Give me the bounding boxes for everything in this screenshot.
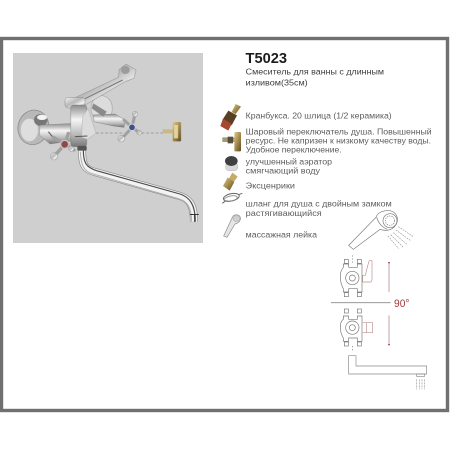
- upper lever: [363, 261, 372, 282]
- text: aerator: улучшенный аэратор: [246, 156, 332, 166]
- lever handle: [72, 64, 136, 107]
- text: cartridge: Кранбукса. 20 шлица (1/2 керамика): [246, 110, 392, 120]
- cold cross handle: [118, 111, 142, 142]
- diagram: shower head line drawing: [349, 211, 413, 249]
- lower lever: [363, 323, 373, 333]
- subtitle: [246, 66, 384, 88]
- hot cross handle: [50, 133, 74, 160]
- text: hand shower: массажная лейка: [246, 230, 317, 240]
- text: aerator: [246, 156, 332, 175]
- panel: faucet photo: [13, 53, 203, 243]
- text: hose: шланг для душа с двойным замком: [246, 199, 392, 209]
- text: aerator: смягчающий воду: [246, 165, 321, 175]
- icon: aerator: [225, 156, 238, 171]
- text: diverter: ресурс. Не капризен к низкому качеству воды.: [246, 135, 431, 145]
- icon: shower hose: [222, 192, 242, 203]
- icon: hand shower small: [224, 215, 240, 237]
- range arrows: [388, 263, 390, 345]
- wall flange right: [91, 96, 112, 121]
- icon: eccentrics: [223, 173, 238, 191]
- text: diverter: Шаровый переключатель душа. Повышенный: [246, 126, 432, 136]
- divider line: [331, 301, 391, 304]
- icon: diverter: [222, 132, 241, 151]
- icon: cartridge: [220, 104, 241, 131]
- body: [39, 123, 78, 144]
- subtitle: Смеситель для ванны с длинным: [246, 66, 384, 76]
- upper position valve: [340, 255, 362, 297]
- text: hose: [246, 199, 392, 218]
- lower position valve: [340, 309, 362, 351]
- spout: [80, 150, 195, 222]
- text: eccentrics: Эксценрики: [246, 181, 295, 191]
- dashed guide: [96, 132, 163, 134]
- diagram: diverter positions: [331, 255, 391, 351]
- diagram: spout line drawing: [349, 356, 427, 389]
- subtitle: изливом(35см): [246, 78, 308, 88]
- text: hose: растягивающийся: [246, 208, 322, 218]
- heading: model number: T5023: [246, 51, 287, 67]
- label: 90 degrees: 90°: [394, 298, 410, 310]
- illustration: wall-mounted bath mixer: [14, 64, 199, 222]
- text: diverter: [246, 126, 432, 154]
- brass cartridge: [163, 122, 181, 141]
- wall flange left: [14, 107, 52, 148]
- text: diverter: Удобное переключение.: [246, 144, 342, 154]
